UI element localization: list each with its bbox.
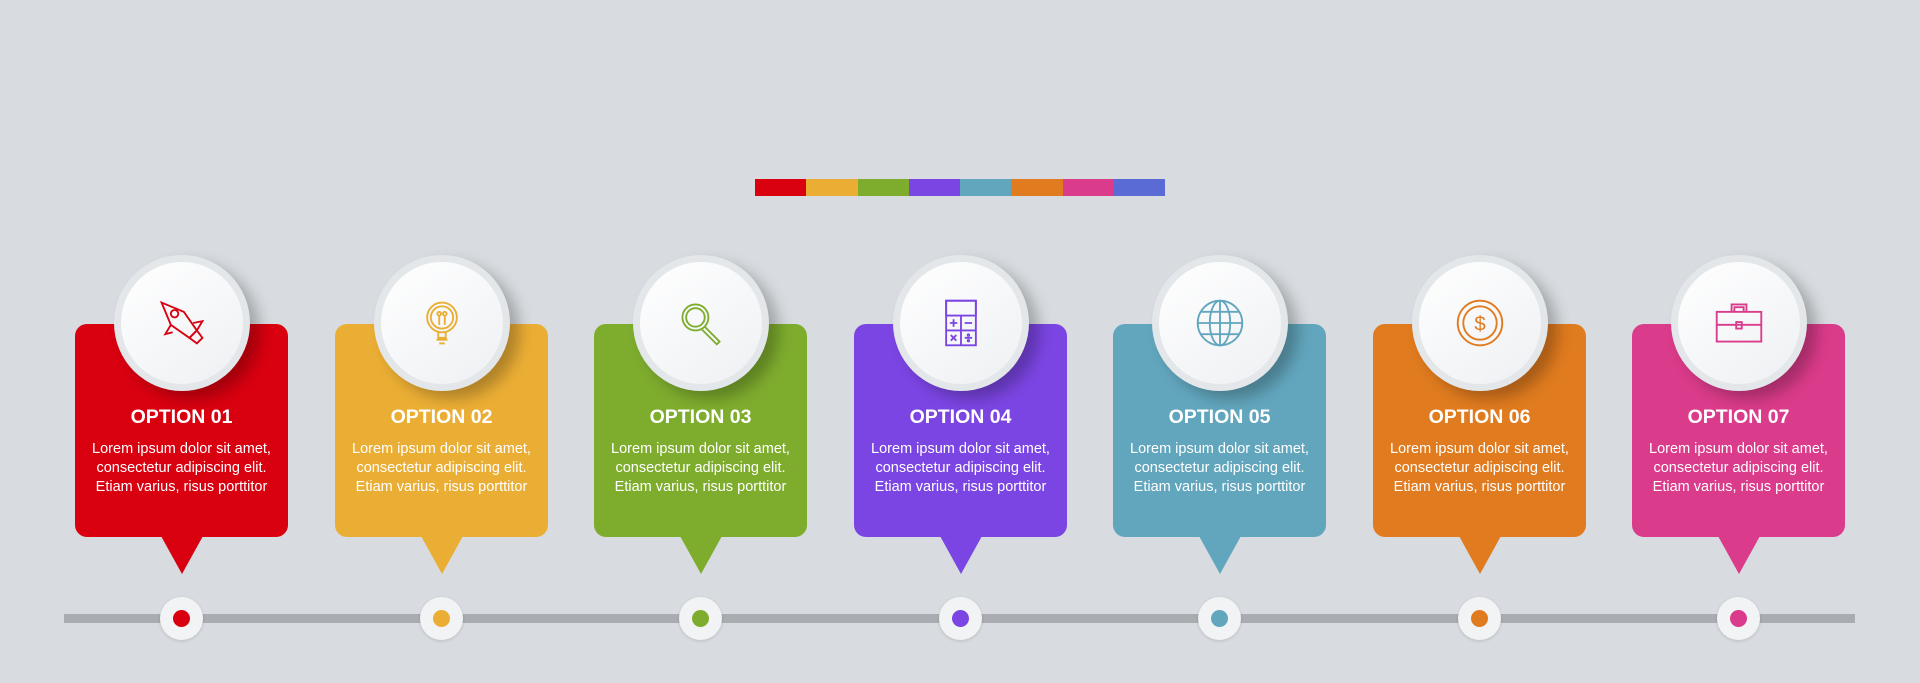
text block: Etiam varius, risus porttitor bbox=[1653, 479, 1824, 495]
text block: consectetur adipiscing elit. bbox=[615, 460, 786, 476]
text block: consectetur adipiscing elit. bbox=[356, 460, 527, 476]
text block: Etiam varius, risus porttitor bbox=[615, 479, 786, 495]
text block: Etiam varius, risus porttitor bbox=[1134, 479, 1305, 495]
text block bbox=[92, 441, 271, 495]
heading: OPTION 03 bbox=[650, 406, 751, 428]
timeline dot 3 bbox=[679, 597, 722, 640]
icon: calculator bbox=[893, 255, 1029, 391]
text block: Lorem ipsum dolor sit amet, bbox=[92, 441, 271, 457]
icon: rocket bbox=[114, 255, 250, 391]
timeline dot 1 bbox=[160, 597, 203, 640]
text block: Lorem ipsum dolor sit amet, bbox=[871, 441, 1050, 457]
icon: bulb bbox=[374, 255, 510, 391]
timeline dot 7 bbox=[1717, 597, 1760, 640]
text block: Etiam varius, risus porttitor bbox=[1394, 479, 1565, 495]
text block: consectetur adipiscing elit. bbox=[1134, 460, 1305, 476]
panel: option 01 bbox=[75, 255, 288, 574]
heading: OPTION 05 bbox=[1169, 406, 1270, 428]
text block: Etiam varius, risus porttitor bbox=[356, 479, 527, 495]
text block bbox=[871, 441, 1050, 495]
heading: OPTION 06 bbox=[1429, 406, 1530, 428]
panel: option 07 bbox=[1632, 255, 1845, 574]
text block bbox=[611, 441, 790, 495]
text block: consectetur adipiscing elit. bbox=[96, 460, 267, 476]
text block: consectetur adipiscing elit. bbox=[1653, 460, 1824, 476]
text block: consectetur adipiscing elit. bbox=[875, 460, 1046, 476]
icon: magnifier bbox=[633, 255, 769, 391]
text block: Lorem ipsum dolor sit amet, bbox=[1390, 441, 1569, 457]
text block bbox=[1649, 441, 1828, 495]
timeline bbox=[64, 614, 1855, 623]
timeline dot 6 bbox=[1458, 597, 1501, 640]
heading: OPTION 01 bbox=[131, 406, 232, 428]
panel: option 06 bbox=[1373, 255, 1586, 574]
heading: OPTION 04 bbox=[910, 406, 1011, 428]
text block bbox=[1390, 441, 1569, 495]
timeline dot 5 bbox=[1198, 597, 1241, 640]
text block bbox=[1130, 441, 1309, 495]
timeline dot 4 bbox=[939, 597, 982, 640]
color bar bbox=[755, 179, 1165, 196]
panel: option 02 bbox=[335, 255, 548, 574]
text block: Etiam varius, risus porttitor bbox=[96, 479, 267, 495]
icon: briefcase bbox=[1671, 255, 1807, 391]
text block: Lorem ipsum dolor sit amet, bbox=[1649, 441, 1828, 457]
heading: OPTION 07 bbox=[1688, 406, 1789, 428]
text block: Lorem ipsum dolor sit amet, bbox=[611, 441, 790, 457]
text block: Etiam varius, risus porttitor bbox=[875, 479, 1046, 495]
heading: OPTION 02 bbox=[391, 406, 492, 428]
icon: globe bbox=[1152, 255, 1288, 391]
icon: coin bbox=[1412, 255, 1548, 391]
text block: Lorem ipsum dolor sit amet, bbox=[352, 441, 531, 457]
timeline dot 2 bbox=[420, 597, 463, 640]
icon: coin: $ bbox=[1474, 313, 1486, 335]
panel: option 04 bbox=[854, 255, 1067, 574]
text block: consectetur adipiscing elit. bbox=[1394, 460, 1565, 476]
panel: option 03 bbox=[594, 255, 807, 574]
text block bbox=[352, 441, 531, 495]
text block: Lorem ipsum dolor sit amet, bbox=[1130, 441, 1309, 457]
panel: option 05 bbox=[1113, 255, 1326, 574]
